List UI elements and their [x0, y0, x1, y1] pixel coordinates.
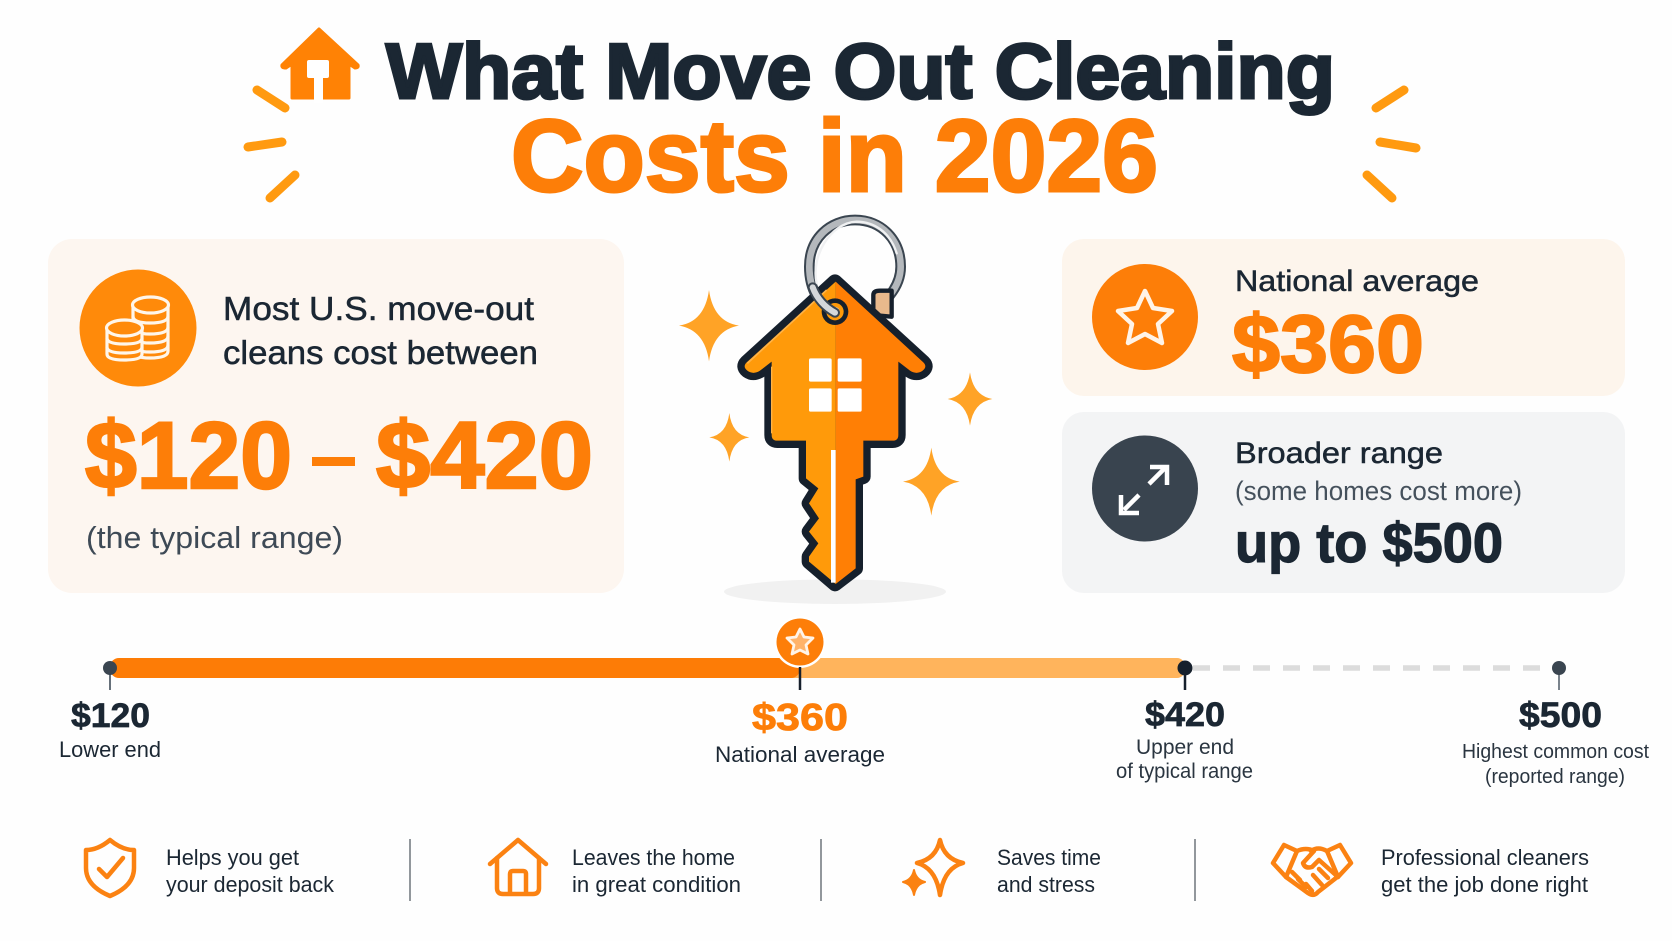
icon: expand arrows	[1092, 436, 1198, 542]
marker: 500: Highest common cost	[1462, 741, 1649, 763]
text: typical range note: (the typical range)	[86, 520, 343, 555]
benefits row	[86, 839, 1589, 901]
key hole	[822, 298, 848, 325]
marker: 360: National average	[715, 742, 885, 767]
illustration: house key	[679, 220, 992, 604]
text: broader range label: Broader range	[1235, 437, 1443, 470]
marker: 120	[59, 661, 161, 762]
marker: 420: $420	[1145, 696, 1225, 734]
benefit: time: Saves time	[997, 845, 1101, 870]
text: intro: cleans cost between	[223, 334, 538, 371]
text: intro: Most U.S. move-out	[223, 290, 534, 327]
benefit: deposit: your deposit back	[166, 872, 335, 897]
marker: 360: $360	[752, 697, 848, 739]
key tab	[873, 291, 892, 317]
marker: 360	[715, 616, 885, 767]
marker: 120: Lower end	[59, 737, 161, 762]
stat: range	[85, 403, 593, 509]
benefit: deposit: Helps you get	[166, 845, 299, 870]
stat: up to 500: up to $500	[1235, 511, 1503, 574]
panel: broader range	[1062, 412, 1625, 593]
text: intro	[223, 290, 538, 371]
bar: dashed extension	[1193, 665, 1551, 671]
key ring	[809, 220, 901, 313]
benefit: professionals: get the job done right	[1381, 872, 1588, 897]
marker: 420: Upper end	[1136, 736, 1234, 759]
price range timeline	[59, 616, 1649, 788]
ring front	[813, 287, 835, 313]
stat: range: $120	[85, 403, 292, 509]
title line 1: What Move Out Cleaning	[386, 27, 1335, 115]
title line 2: Costs in 2026	[511, 99, 1158, 213]
panel: national average	[1062, 239, 1625, 396]
marker: 120: $120	[71, 697, 150, 735]
sparkles	[679, 290, 992, 516]
benefit: time: and stress	[997, 872, 1095, 897]
marker: 500: $500	[1519, 696, 1602, 735]
marker: 500	[1462, 661, 1649, 788]
bar: light segment	[780, 658, 1185, 678]
stat: 360: $360	[1232, 299, 1424, 390]
benefit: time	[903, 840, 1101, 897]
decorative rays	[248, 90, 1416, 198]
bar: solid segment	[110, 658, 800, 678]
icon: house	[282, 29, 358, 103]
benefit: professionals: Professional cleaners	[1381, 845, 1589, 870]
key body	[745, 282, 925, 584]
shadow	[724, 579, 946, 604]
panel: typical range	[48, 239, 624, 593]
benefit: deposit	[86, 840, 335, 897]
text: broader range note: (some homes cost more)	[1235, 476, 1522, 506]
marker: 420	[1116, 660, 1253, 783]
header	[248, 27, 1416, 213]
benefit: condition: in great condition	[572, 872, 741, 897]
stat: range: $420	[376, 403, 593, 509]
marker: 500: (reported range)	[1485, 766, 1625, 788]
icon: star	[1092, 264, 1198, 370]
benefit: condition	[490, 840, 741, 897]
benefit: condition: Leaves the home	[572, 845, 735, 870]
benefit: professionals	[1273, 845, 1589, 897]
icon: coins	[80, 270, 196, 386]
text: national average label: National average	[1235, 265, 1479, 298]
marker: 420: of typical range	[1116, 760, 1253, 783]
